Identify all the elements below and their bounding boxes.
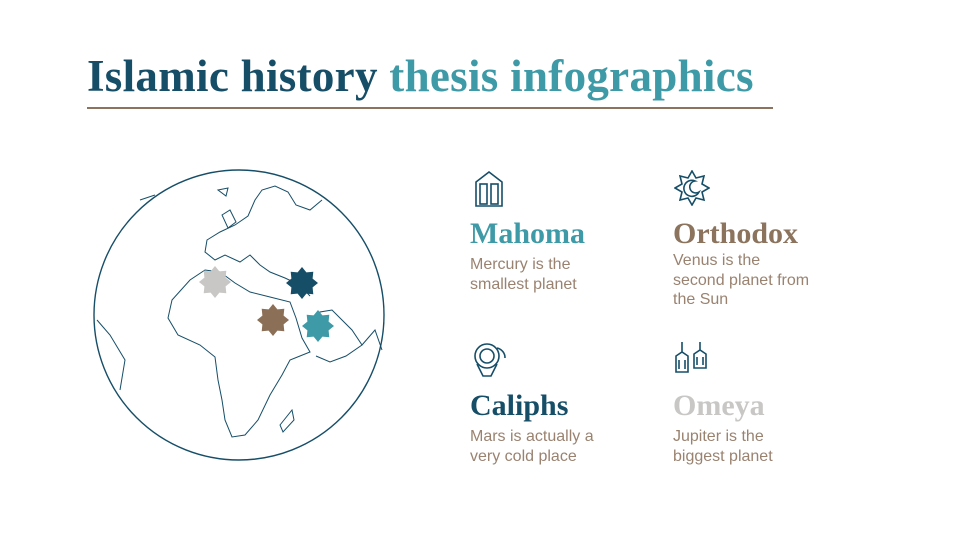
item: Caliphs: Mars is actually a bbox=[470, 428, 594, 445]
item: Orthodox: Orthodox bbox=[673, 217, 798, 250]
item: Caliphs: very cold place bbox=[470, 448, 577, 464]
item: Omeya: Omeya bbox=[673, 389, 765, 422]
item: Mahoma: Mahoma bbox=[470, 217, 585, 250]
stars bbox=[199, 266, 334, 342]
item: Mahoma bbox=[470, 217, 585, 292]
item: Caliphs: Caliphs bbox=[470, 389, 568, 422]
item: Caliphs bbox=[470, 389, 594, 464]
item: Orthodox: the Sun bbox=[673, 291, 728, 308]
item: Orthodox bbox=[673, 217, 809, 308]
icon: lanterns bbox=[675, 342, 707, 373]
item: Orthodox: second planet from bbox=[673, 272, 809, 288]
item: Mahoma: Mercury is the bbox=[470, 256, 570, 273]
item: Orthodox: Venus is the bbox=[673, 252, 760, 269]
icon: lantern balloon bbox=[474, 343, 506, 377]
item: Omeya: biggest planet bbox=[673, 448, 773, 464]
item: Omeya bbox=[673, 389, 773, 464]
item: Mahoma: smallest planet bbox=[470, 276, 577, 292]
icon: door bbox=[475, 171, 503, 207]
icon: star crescent bbox=[674, 170, 710, 206]
item: Omeya: Jupiter is the bbox=[673, 428, 764, 445]
title: Islamic history thesis infographics bbox=[87, 51, 754, 101]
